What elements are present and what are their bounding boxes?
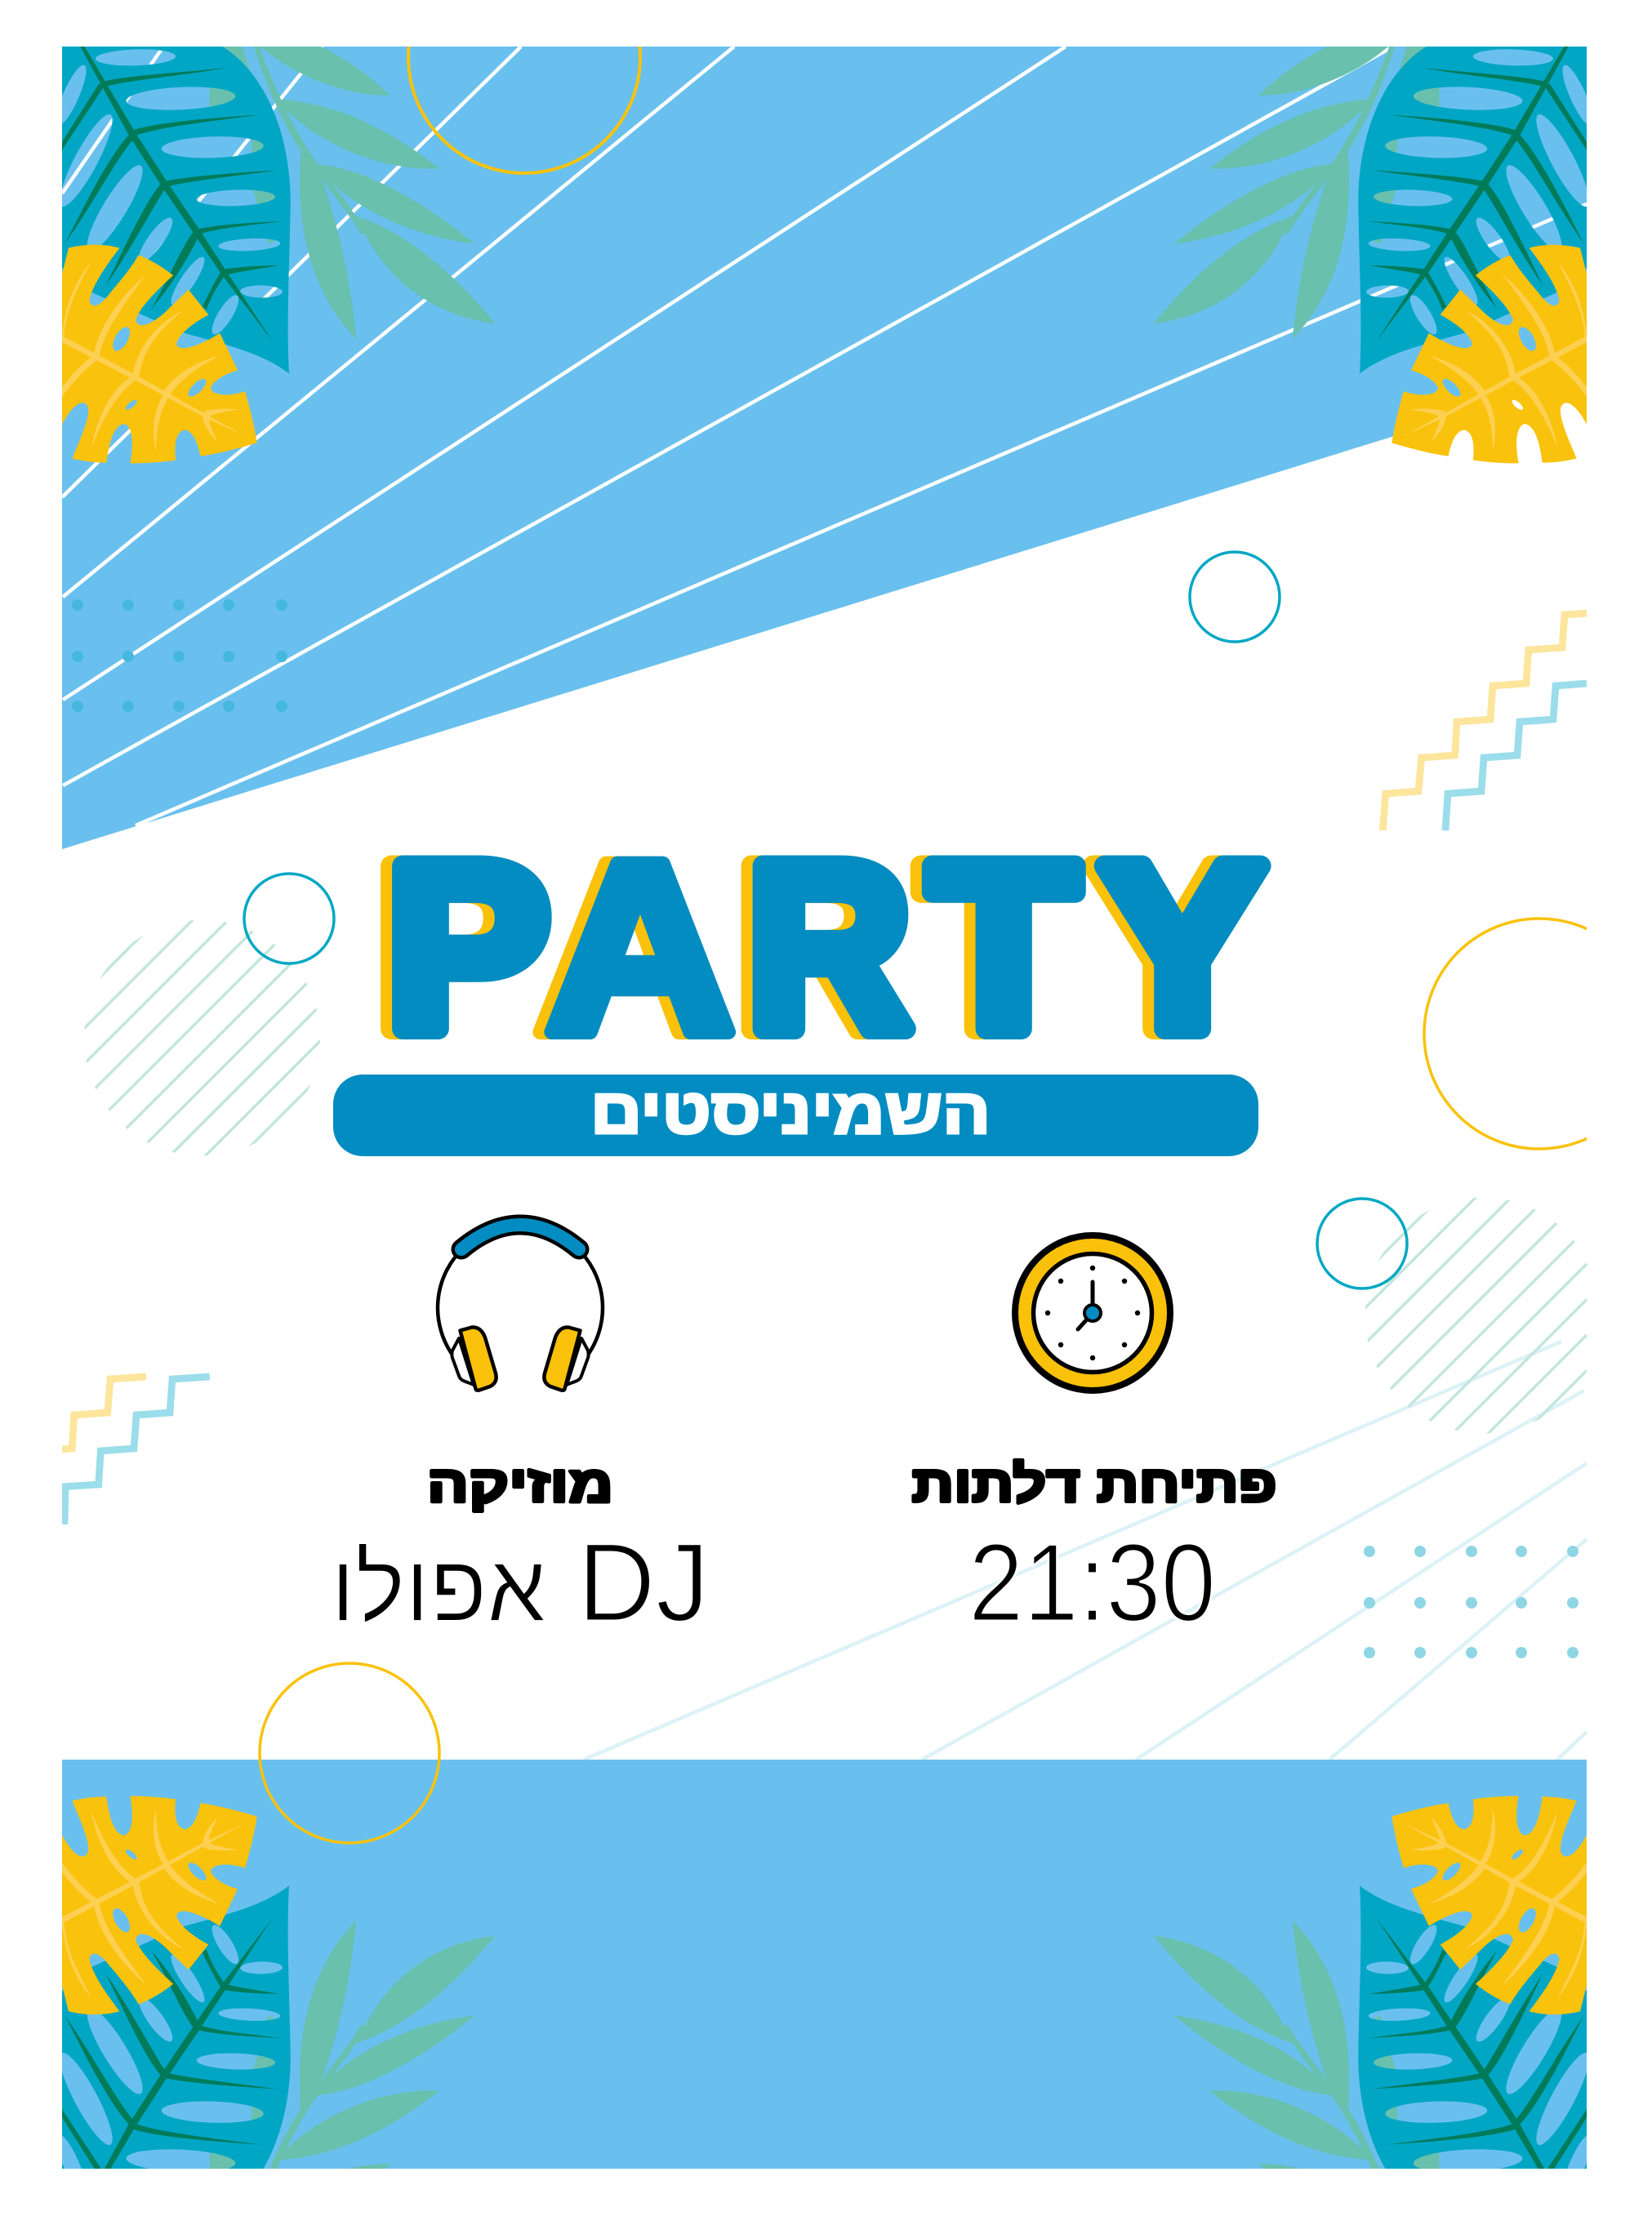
- title: PARTY: [376, 810, 1264, 1084]
- dot grid lower right: [1364, 1546, 1579, 1658]
- icon: clock: [1015, 1235, 1170, 1391]
- title: PARTY: P: [387, 815, 549, 1079]
- zigzag lines top right: [1383, 613, 1587, 830]
- title: PARTY: T: [930, 815, 1078, 1079]
- leaves: top right: [1154, 47, 1587, 463]
- value: DJ name: [331, 1520, 710, 1645]
- title: PARTY: R: [748, 815, 911, 1079]
- title: PARTY: Y: [1101, 815, 1264, 1079]
- title: PARTY: Y: [1089, 815, 1253, 1079]
- leaves: top left: [62, 47, 495, 463]
- subtitle pill: [333, 1075, 1258, 1156]
- label: doors opening heading: פתיחת דלתות: [911, 1456, 1277, 1513]
- hatched circle left: [84, 919, 320, 1156]
- yellow circle right: [1423, 917, 1587, 1150]
- panel: top blue wedge: [62, 47, 1587, 849]
- icon: headphones: [438, 1225, 603, 1391]
- title: PARTY: T: [919, 815, 1066, 1079]
- faint diagonal lines lower right: [584, 1342, 1587, 1760]
- leaves: bottom right: [1154, 1796, 1587, 2169]
- value: DJ name: אפולו: [331, 1534, 546, 1641]
- white diagonal lines: [62, 47, 1587, 826]
- subtitle pill: השמיניסטים: [590, 1075, 991, 1147]
- hatched circle right: [1365, 1197, 1587, 1434]
- zigzag lines left: [62, 1377, 210, 1524]
- dot grid top left: [72, 599, 287, 712]
- value: DJ name: DJ: [577, 1520, 710, 1645]
- title: PARTY: R: [737, 815, 899, 1079]
- label: music heading: מוזיקה: [427, 1456, 613, 1513]
- yellow circle top: [407, 47, 642, 175]
- title: PARTY: A: [534, 810, 724, 1084]
- panel: bottom blue band: [62, 1760, 1587, 2169]
- title: PARTY: P: [376, 815, 537, 1079]
- yellow circle bottom left: [260, 1663, 439, 1843]
- leaves: bottom left: [62, 1796, 495, 2169]
- teal ring circles: [244, 552, 1407, 1288]
- value: door time: 21:30: [968, 1520, 1216, 1644]
- title: PARTY: A: [545, 810, 735, 1084]
